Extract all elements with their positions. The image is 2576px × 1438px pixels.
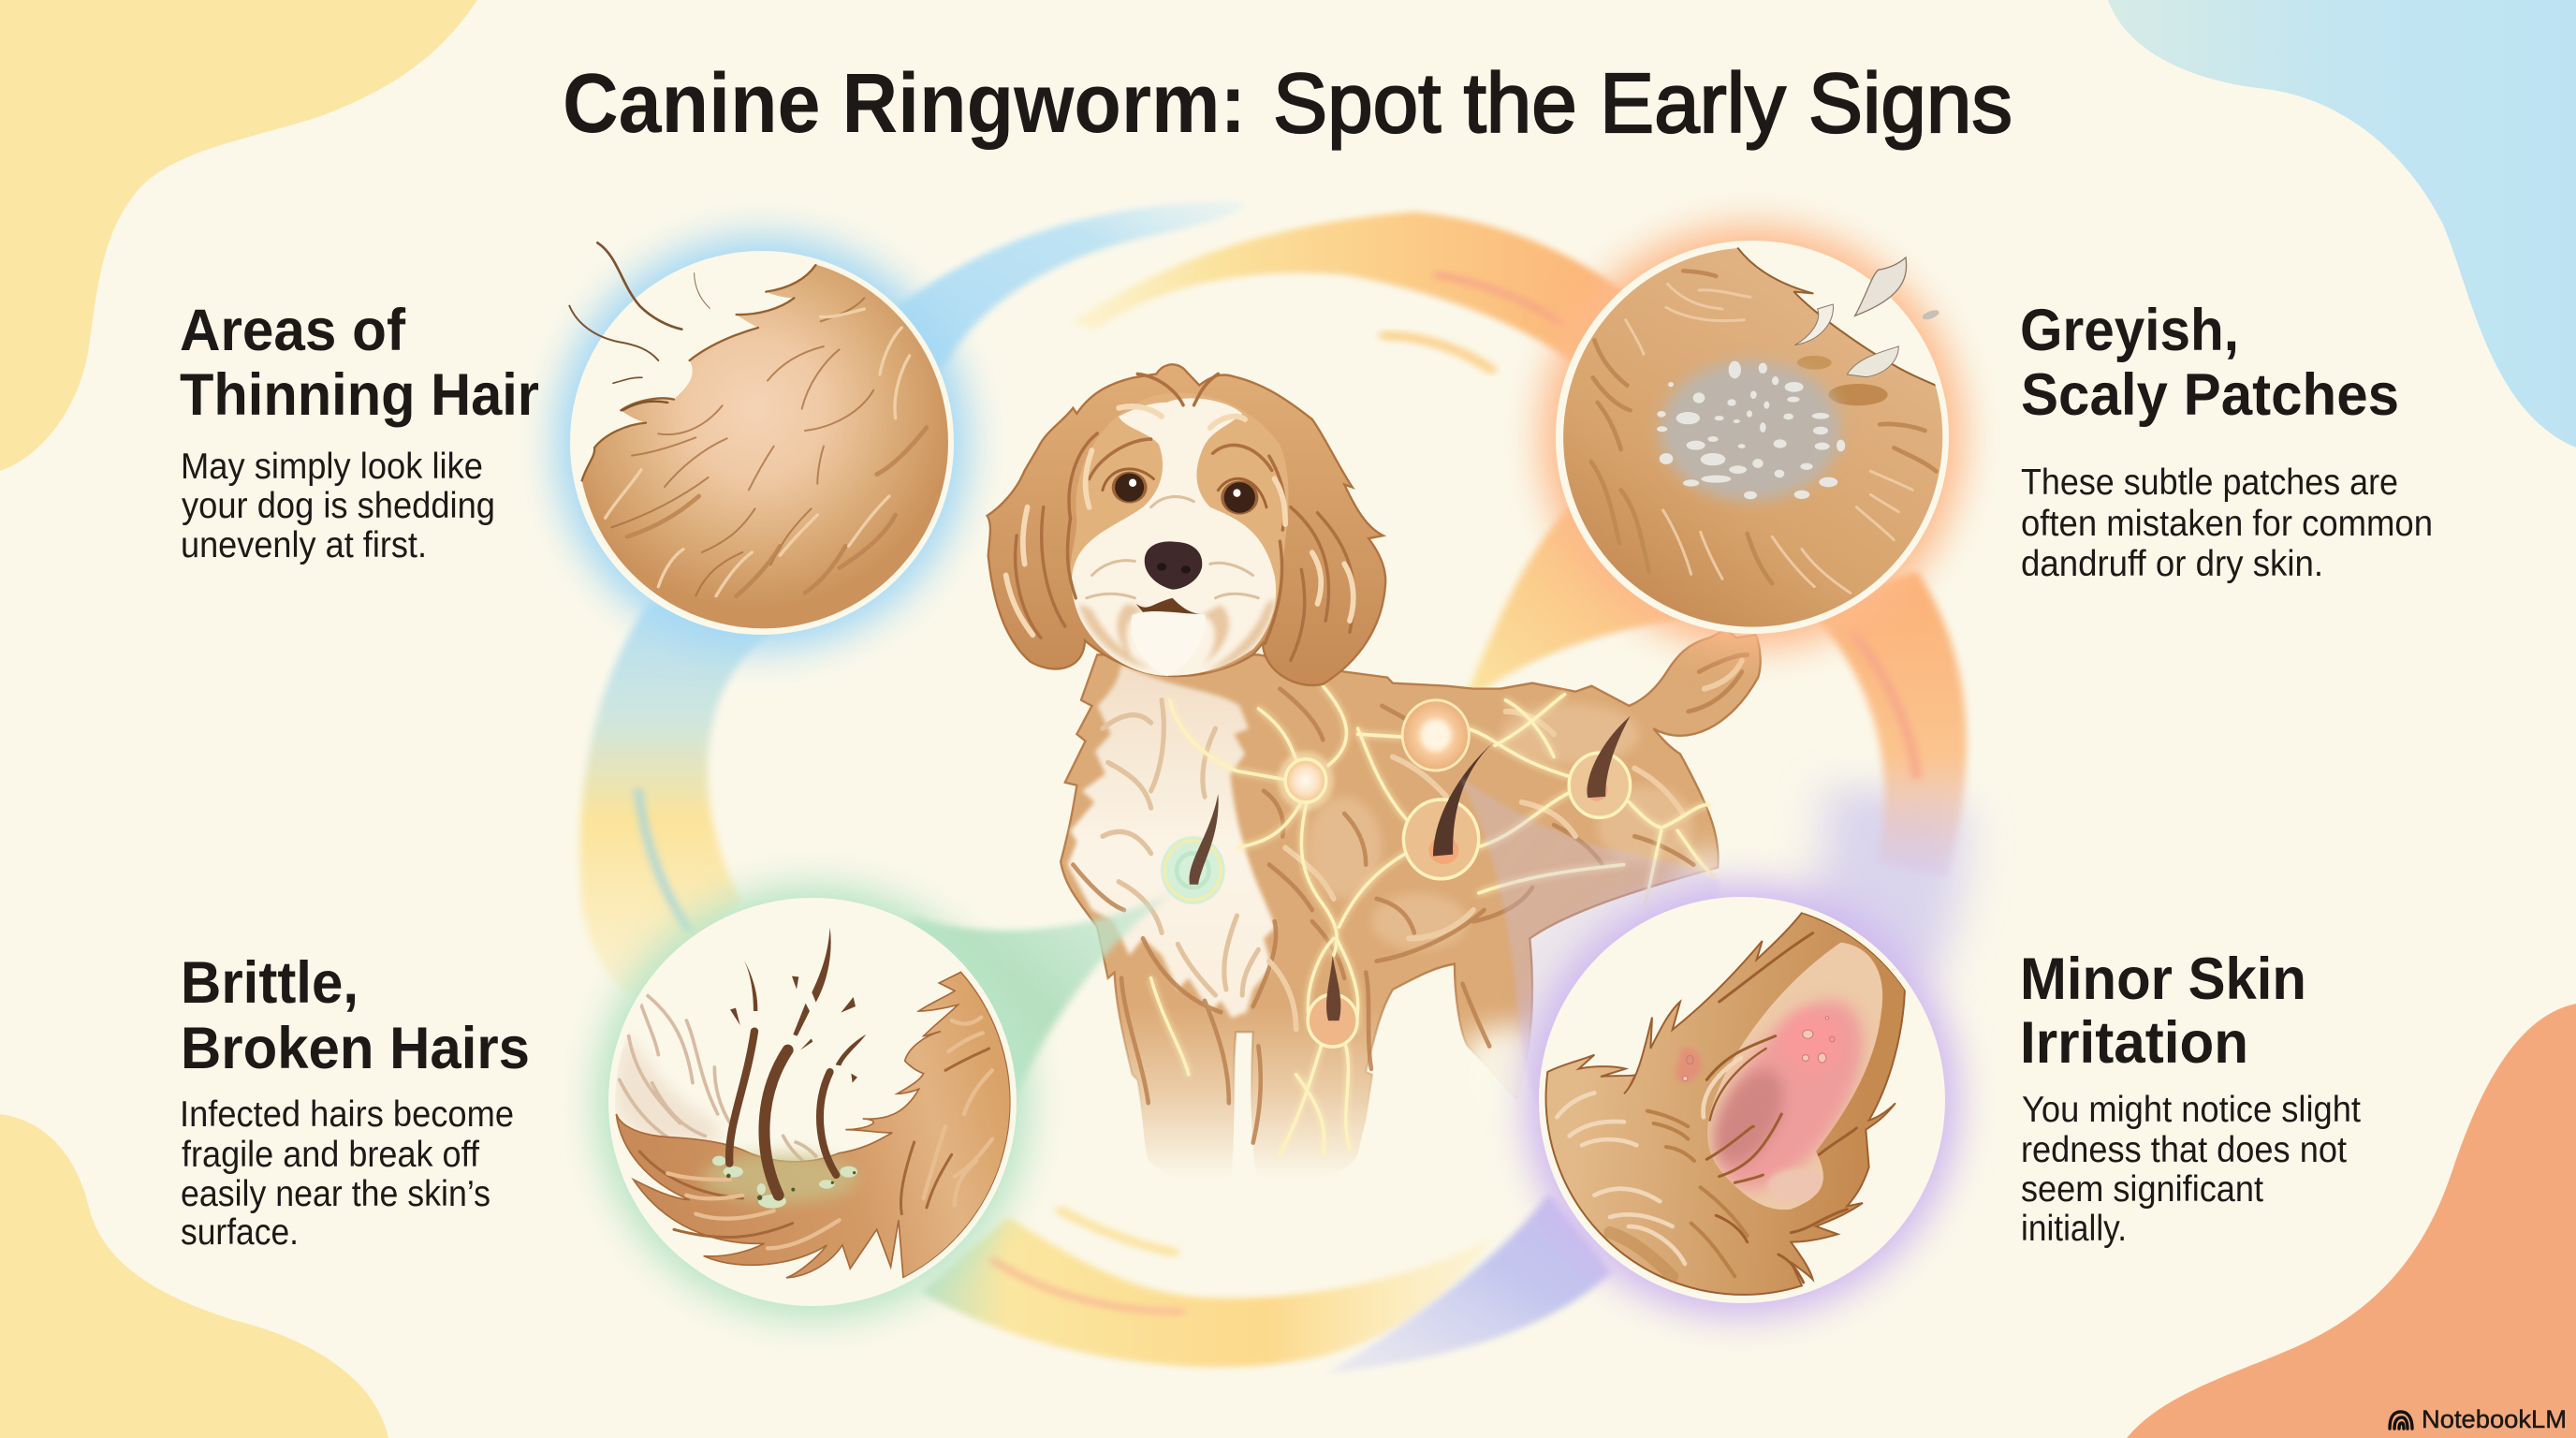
panel: broken hairs circle [595,885,1030,1319]
grey scaly patch [1660,360,1841,501]
dog muzzle fur strokes [1087,496,1258,598]
body text [2021,1090,2361,1249]
corner blob: yellow top left [0,0,477,471]
circle glow: orange [1541,226,1964,649]
title [563,57,2012,151]
pale fluff strokes [620,995,816,1163]
dog light fur highlights [1269,660,1742,1029]
dog jowl shading [1078,598,1276,672]
dog hair and ears silhouette [988,364,1385,685]
wedge: lavender link to ear circle [1460,777,1720,1131]
fur top edge line [582,265,816,480]
ear light strokes [1557,1058,1741,1264]
text panel: greyish scaly patches [2020,298,2433,584]
heading: Areas of [180,298,406,363]
dog forehead blaze and muzzle [1072,398,1276,676]
soft fluff tint [615,1033,721,1145]
fur illustration: inflamed ear [1546,913,1905,1295]
dog ear and head fur strokes [1016,374,1354,660]
dark fur strokes [1591,271,1936,583]
band streak: pink right [1853,634,1917,775]
band streak: teal left [638,791,689,930]
dog eyes [1112,472,1258,515]
NotebookLM watermark [2390,1405,2567,1433]
heading: Minor Skin [2020,946,2306,1012]
hair follicle node: rear [1569,716,1631,817]
hair follicle node: centre [1403,741,1495,879]
circle frame [1556,241,1949,634]
dog body light patches [1307,703,1693,949]
band: yellow to orange top [1071,212,1656,405]
body text: These subtle patches are [2021,462,2398,503]
ear and fur mass [1546,913,1905,1295]
heading: Brittle, [181,950,359,1016]
band: blue top left [882,201,1242,405]
rear leg and rump fade [1460,847,1748,1123]
hair follicle node: leg [1308,956,1357,1047]
inner ear base [1691,933,1897,1220]
fur outline [1738,248,1936,386]
ear fur dark strokes [1706,933,1856,1283]
light fur strokes [606,309,910,596]
pink blush near fold [1676,1048,1701,1083]
icon: notebook arcs [2390,1412,2412,1429]
body text: surface. [181,1212,299,1253]
light fur strokes [1626,284,1912,593]
band streak: small inner yellow [1061,1211,1174,1253]
dog chest fur strokes [1103,700,1258,995]
dog mouth and chin [1132,598,1206,676]
body text [2021,462,2433,584]
circle frame [570,251,954,635]
vein node: pale centre [1278,751,1334,810]
bright red spot [1781,1011,1841,1070]
circle frame [608,898,1017,1306]
dog eye surrounds [1103,469,1266,507]
body text: often mistaken for common [2021,504,2433,544]
pale lower lobe [1767,1168,1827,1203]
band: left blue to yellow [579,602,785,996]
body text: Infected hairs become [180,1094,514,1135]
title: Spot the Early Signs [1273,57,2012,151]
body text: initially. [2021,1209,2127,1249]
heading [180,298,539,428]
wordmark: NotebookLM [2422,1405,2567,1433]
text panel: brittle broken hairs [180,950,530,1253]
circle glow: blue [554,235,970,651]
tinted infected skin [702,1153,858,1203]
band streak: pink bottom [993,1260,1181,1312]
band: yellow bottom [921,1217,1496,1367]
heading: Broken Hairs [181,1016,530,1081]
text panel: areas of thinning hair [180,298,539,565]
heading: Thinning Hair [180,362,539,428]
body text: easily near the skin’s [181,1174,490,1214]
dog fur highlights on head [1006,406,1354,635]
body text: fragile and break off [182,1135,479,1175]
body text: seem significant [2021,1169,2263,1210]
corner blob: yellow bottom left [0,1114,388,1438]
darker pink shadow [1700,1059,1798,1176]
body text: your dog is shedding [182,486,495,526]
panel: skin irritation circle [1525,883,1959,1317]
pink flush [1690,977,1892,1213]
band: lavender right [1772,784,1966,989]
body text [181,447,495,565]
circle glow: purple [1525,883,1959,1317]
heading: Greyish, [2020,298,2239,363]
brown blotches [1797,356,1832,370]
text panel: minor skin irritation [2020,946,2361,1249]
circle frame [1539,897,1945,1303]
fur mass [1563,248,1943,627]
corner blob: orange bottom right [2127,1004,2576,1438]
dog nose [1145,541,1202,590]
green infected skin flecks [712,1156,857,1209]
skin bumps [1683,1017,1835,1081]
title: Canine Ringworm: [563,57,1246,151]
body text: You might notice slight [2022,1090,2361,1130]
body text: redness that does not [2021,1130,2347,1170]
heading [181,950,530,1081]
dark fur strokes [611,298,873,596]
fur brown shading [1610,1111,1748,1276]
band streak: pink top [1438,275,1559,322]
dark fur strokes [639,1049,989,1238]
body text: dandruff or dry skin. [2021,544,2323,584]
hair follicle node: chest green [1161,794,1225,904]
band: periwinkle bottom [1326,1194,1612,1373]
heading: Scaly Patches [2021,362,2399,428]
inner ear [1690,933,1897,1220]
wedge: orange toward dog [1462,504,1685,706]
fur mass [616,972,1010,1278]
vein node: orange sun [1402,700,1469,770]
body text: May simply look like [181,447,483,487]
band streak: small inner orange [1384,336,1491,370]
brown shading strokes [627,428,927,596]
dog white chest [1068,663,1276,1018]
dark specks [726,1171,856,1200]
light fur strokes [667,1018,992,1248]
fur illustration: thinning patch [582,265,949,628]
fur illustration: broken hairs [615,972,1010,1278]
panel: scaly patch circle [1541,226,1964,649]
falling skin flakes [1794,257,1940,377]
body text: unevenly at first. [181,525,427,565]
white skin flakes [1657,361,1845,499]
fur illustration: scaly skin [1563,248,1943,627]
corner blob: blue top right [2108,0,2576,448]
heading [2020,298,2399,428]
fur mass [582,265,949,628]
dog fur strokes [1073,654,1748,1143]
band: orange right [1810,570,1967,878]
dog face [1070,393,1288,676]
shed hairs [569,242,710,410]
heading: Irritation [2020,1010,2248,1076]
broken hair shafts [729,928,866,1196]
heading [2020,946,2306,1076]
body text [180,1094,514,1253]
swirling colour ring behind the dog [579,201,1967,1373]
wedge: green link to broken hair circle [911,892,1174,1114]
dog glowing vein network [1151,686,1715,1154]
dog body [1061,629,1761,1183]
panel: thinning hair circle [554,235,970,651]
central dog illustration [988,364,1761,1183]
circle glow: green [595,885,1030,1319]
